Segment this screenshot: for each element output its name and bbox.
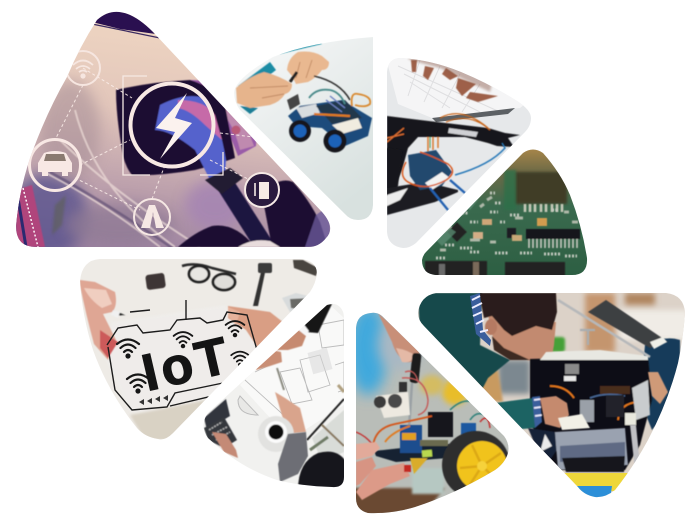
laptop with typing hand	[204, 399, 238, 458]
panel: engineer repairing robot	[415, 290, 690, 500]
icon: fuel pump circle	[245, 173, 279, 207]
table surface	[234, 37, 373, 220]
dashed connection network	[55, 68, 262, 210]
blurred background	[348, 305, 515, 518]
machine body	[530, 350, 652, 470]
desk background	[75, 255, 325, 445]
wheel with yellow hub	[442, 431, 510, 499]
ultrasonic sensor	[374, 371, 428, 418]
icon: wifi circle	[66, 51, 100, 85]
circuit outline	[107, 300, 257, 410]
icon: car circle	[30, 140, 80, 190]
hand on second person	[648, 372, 668, 404]
pale tablet screen	[102, 305, 262, 420]
photo base: city road and charger tint	[16, 12, 330, 247]
lower machine parts	[528, 414, 640, 472]
hands assembling robot	[236, 40, 350, 114]
panel: robot car with screwdriver	[348, 305, 515, 518]
compass arc	[238, 396, 258, 415]
head and hair	[479, 293, 557, 361]
panel: blueprint meeting	[200, 300, 350, 490]
notebook and pencils	[307, 385, 344, 462]
icon: lightning in ring	[130, 84, 214, 166]
arrows decoration	[139, 395, 168, 405]
engineer arm and hand	[495, 396, 569, 430]
car body and charging cable	[178, 168, 330, 247]
collar	[470, 293, 491, 346]
table and blueprint	[204, 304, 344, 484]
desk surface	[387, 66, 531, 248]
panel: green circuit board	[422, 150, 588, 275]
fingers holding car	[356, 442, 428, 500]
wifi symbols	[117, 321, 249, 394]
IoT lettering: IoT	[137, 326, 238, 403]
desk objects: phone, glasses, watch, tablet	[145, 260, 318, 312]
finger and screwdriver	[378, 313, 422, 458]
blurred chip background	[502, 168, 568, 213]
robot arm	[387, 114, 520, 196]
blue shirt of second person	[640, 338, 680, 430]
panel: electric vehicle charging	[16, 12, 330, 247]
panel: IoT hand drawing	[75, 255, 325, 445]
icon: road circle	[134, 199, 170, 235]
yellow and blue base	[560, 473, 630, 500]
board, relay and wires	[356, 401, 495, 462]
panel: robot car on table	[234, 37, 373, 220]
suit sleeve and hands	[256, 304, 332, 434]
blurred workshop background	[415, 290, 690, 500]
board base	[422, 150, 588, 275]
teal sweater	[418, 293, 510, 405]
coffee cup	[258, 416, 294, 452]
robot chassis and wheels	[288, 90, 372, 152]
charger socket	[116, 80, 256, 184]
seated person sleeve and hair	[278, 432, 346, 490]
hands and pen	[80, 280, 288, 360]
controller boards, wires and base	[387, 143, 505, 215]
panel: robotic arm and keyboard	[387, 58, 531, 248]
keyboard and typing hands	[388, 58, 523, 122]
sharp chips and components	[424, 190, 580, 275]
focus brackets	[123, 76, 223, 175]
opened lid with strut	[558, 300, 668, 357]
